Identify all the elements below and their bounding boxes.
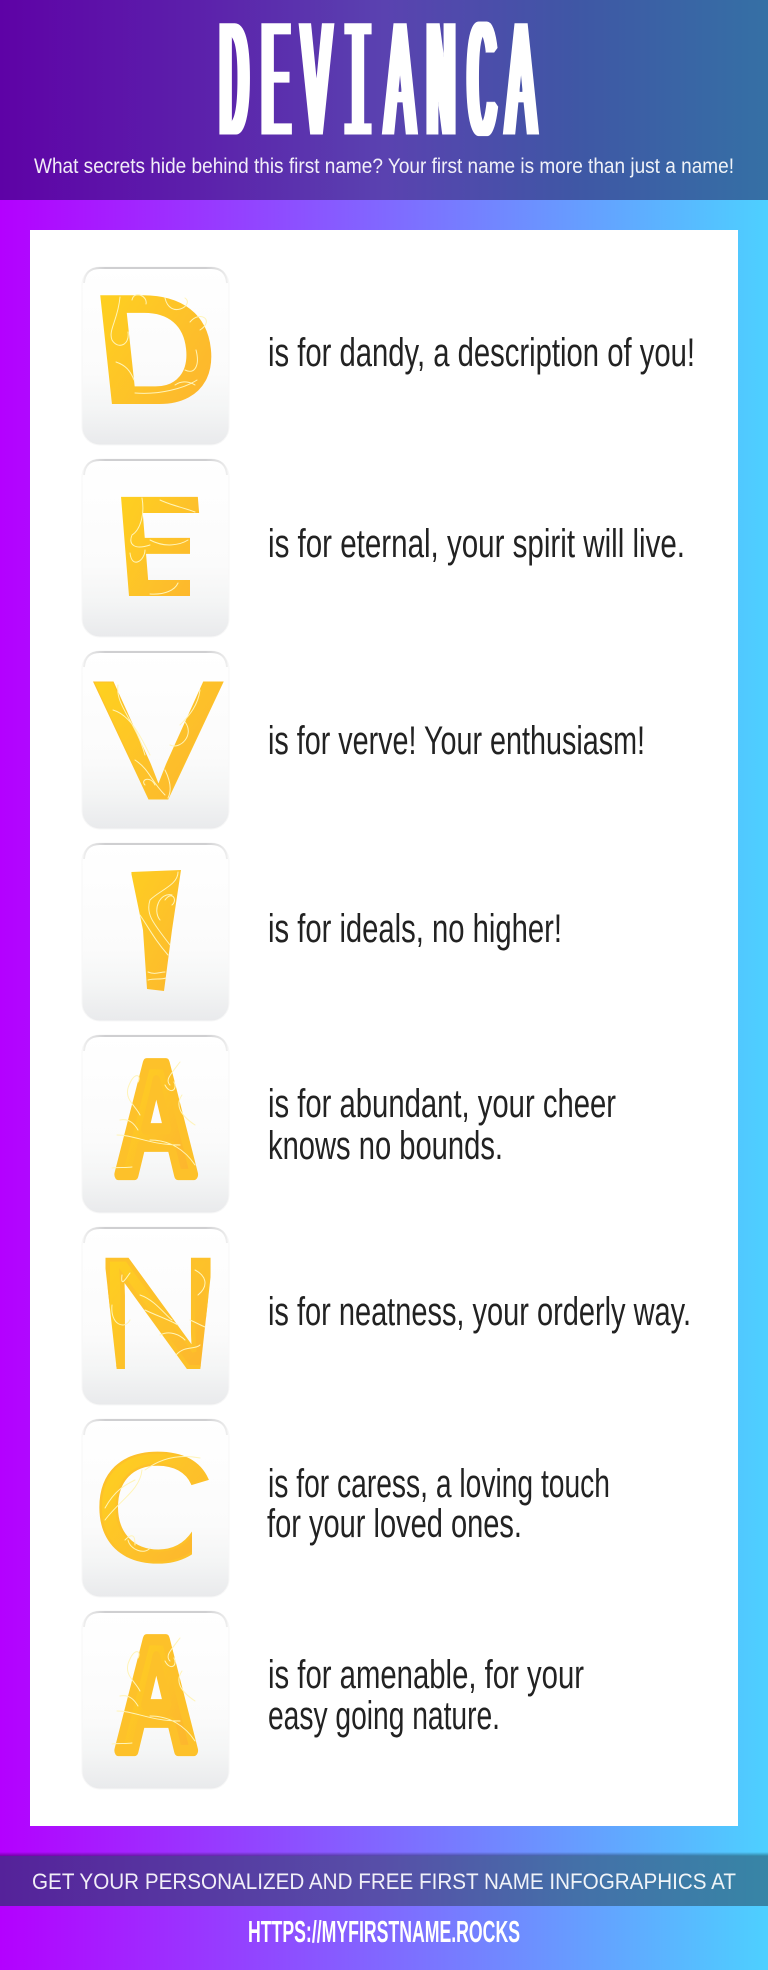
- footer URL: HTTPS://MYFIRSTNAME.ROCKS: [248, 1914, 520, 1949]
- row: I: [82, 843, 560, 1020]
- tile E: [82, 459, 229, 637]
- footer call to action: GET YOUR PERSONALIZED AND FREE FIRST NAME INFOGRAPHICS AT: [32, 1869, 736, 1894]
- letter C: [99, 1452, 209, 1564]
- description second A: is for amenable, for your: [268, 1653, 584, 1697]
- row: second A: [82, 1606, 584, 1789]
- header band: [0, 0, 768, 200]
- description second A line 2: easy going nature.: [268, 1694, 500, 1738]
- letter N: N: [93, 1226, 223, 1400]
- letter A: A: [116, 1030, 197, 1209]
- row: A: [82, 1030, 616, 1213]
- letter N: [106, 1258, 211, 1369]
- description C: is for caress, a loving touch: [268, 1462, 610, 1506]
- letter E: E: [109, 466, 217, 627]
- description C line 2: for your loved ones.: [267, 1502, 522, 1546]
- letter D: D: [85, 261, 228, 438]
- tile second A: [82, 1611, 229, 1789]
- tile A: [82, 1035, 229, 1213]
- tile D: [82, 267, 229, 445]
- row: E: [82, 459, 685, 637]
- description I: is for ideals, no higher!: [268, 907, 562, 951]
- letter I: [131, 870, 181, 991]
- description A: is for abundant, your cheer: [268, 1082, 616, 1126]
- row: C: [82, 1419, 610, 1597]
- letter E: [121, 496, 200, 596]
- tile N: [82, 1227, 229, 1405]
- row: V: [82, 645, 645, 835]
- letter V: V: [93, 645, 224, 835]
- tile I: [82, 843, 229, 1021]
- white content panel: [30, 230, 738, 1826]
- tile C: [82, 1419, 229, 1597]
- letter I: I: [108, 832, 205, 1028]
- letter second A: A: [116, 1606, 197, 1785]
- letter C: C: [92, 1422, 215, 1594]
- description A line 2: knows no bounds.: [268, 1124, 503, 1168]
- row: D: [82, 261, 695, 445]
- footer band: [0, 1852, 768, 1906]
- row: N: [82, 1226, 691, 1405]
- tile V: [82, 651, 229, 829]
